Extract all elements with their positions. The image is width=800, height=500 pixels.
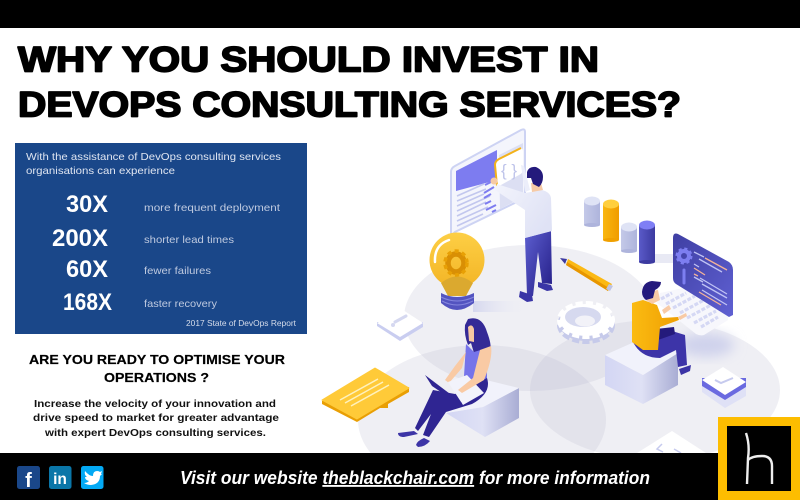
shirt and arm [495, 184, 552, 238]
icon: Twitter [81, 466, 104, 489]
title [18, 40, 681, 124]
icon: yellow speech card [322, 368, 409, 422]
stat: 60X fewer failures [66, 256, 211, 283]
hands [662, 305, 687, 320]
head [646, 290, 660, 304]
icon: Facebook: f [25, 470, 32, 492]
icon: alert card [377, 310, 423, 341]
hoodie [632, 300, 679, 350]
icon: check card [702, 367, 746, 408]
left arm [445, 352, 466, 383]
figure: seated man with laptop [605, 281, 691, 404]
panel intro text: With the assistance of DevOps consulting services [26, 151, 281, 163]
icon: white gear [560, 304, 612, 341]
icon: laptop with code screen [657, 234, 734, 357]
box seat [605, 353, 678, 404]
heading: call to action: ARE YOU READY TO OPTIMISE YOUR [29, 352, 286, 367]
icon: LinkedIn: in [53, 471, 67, 488]
footer website text: Visit our website theblackchair.com for more information [180, 467, 650, 488]
icon: light bulb with gear [430, 232, 528, 312]
body text: drive speed to market for greater advantage [33, 412, 279, 424]
box seat [446, 388, 519, 437]
body text: Increase the velocity of your innovation and [34, 398, 276, 410]
heading: call to action [29, 352, 286, 385]
illustration: isometric DevOps team [322, 129, 780, 495]
icon: code card [637, 431, 706, 453]
top [464, 344, 487, 384]
ground ellipses [358, 245, 780, 495]
stat: 60X fewer failures: 60X [66, 256, 108, 283]
hair [465, 318, 491, 353]
neck and head [531, 183, 543, 192]
legs [525, 231, 552, 296]
title: DEVOPS CONSULTING SERVICES? [18, 86, 681, 124]
footer bar [0, 453, 800, 500]
legs [632, 328, 687, 367]
icon: Facebook [17, 466, 40, 492]
icon: code braces card: { } [501, 161, 517, 180]
stat: 168X faster recovery: 168X [63, 289, 112, 316]
figure: woman on box with laptop [398, 318, 519, 447]
figure: man standing [490, 165, 553, 302]
icon: yellow pencil [560, 258, 613, 291]
icon: code braces card [495, 148, 523, 186]
body text [33, 398, 279, 439]
icon: LinkedIn [49, 466, 72, 489]
body text: with expert DevOps consulting services. [44, 427, 266, 439]
top black bar [0, 0, 800, 28]
panel intro text: organisations can experience [26, 165, 175, 177]
chart: 3D cylinders [584, 196, 675, 264]
heading: call to action: OPERATIONS ? [104, 370, 209, 385]
panel intro text [26, 151, 281, 177]
logo [718, 417, 800, 500]
stat: 30X more frequent deployment [66, 191, 280, 218]
panel: DevOps statistics [15, 143, 307, 334]
stat: 200X shorter lead times: 200X [52, 225, 108, 252]
source note: 2017 State of DevOps Report [186, 318, 297, 328]
stat: 200X shorter lead times [52, 225, 234, 252]
legs [415, 378, 488, 437]
raised arm [521, 165, 530, 192]
right arm [458, 346, 491, 393]
stat: 30X more frequent deployment: more frequent deployment [144, 202, 280, 214]
stat: 60X fewer failures: fewer failures [144, 265, 211, 277]
stat: 168X faster recovery: faster recovery [144, 298, 218, 310]
stat: 30X more frequent deployment: 30X [66, 191, 108, 218]
stat: 200X shorter lead times: shorter lead times [144, 234, 234, 246]
laptop [448, 375, 484, 405]
icon: code screen panel [451, 129, 525, 236]
title: WHY YOU SHOULD INVEST IN [18, 40, 599, 80]
stat: 168X faster recovery [63, 289, 218, 316]
